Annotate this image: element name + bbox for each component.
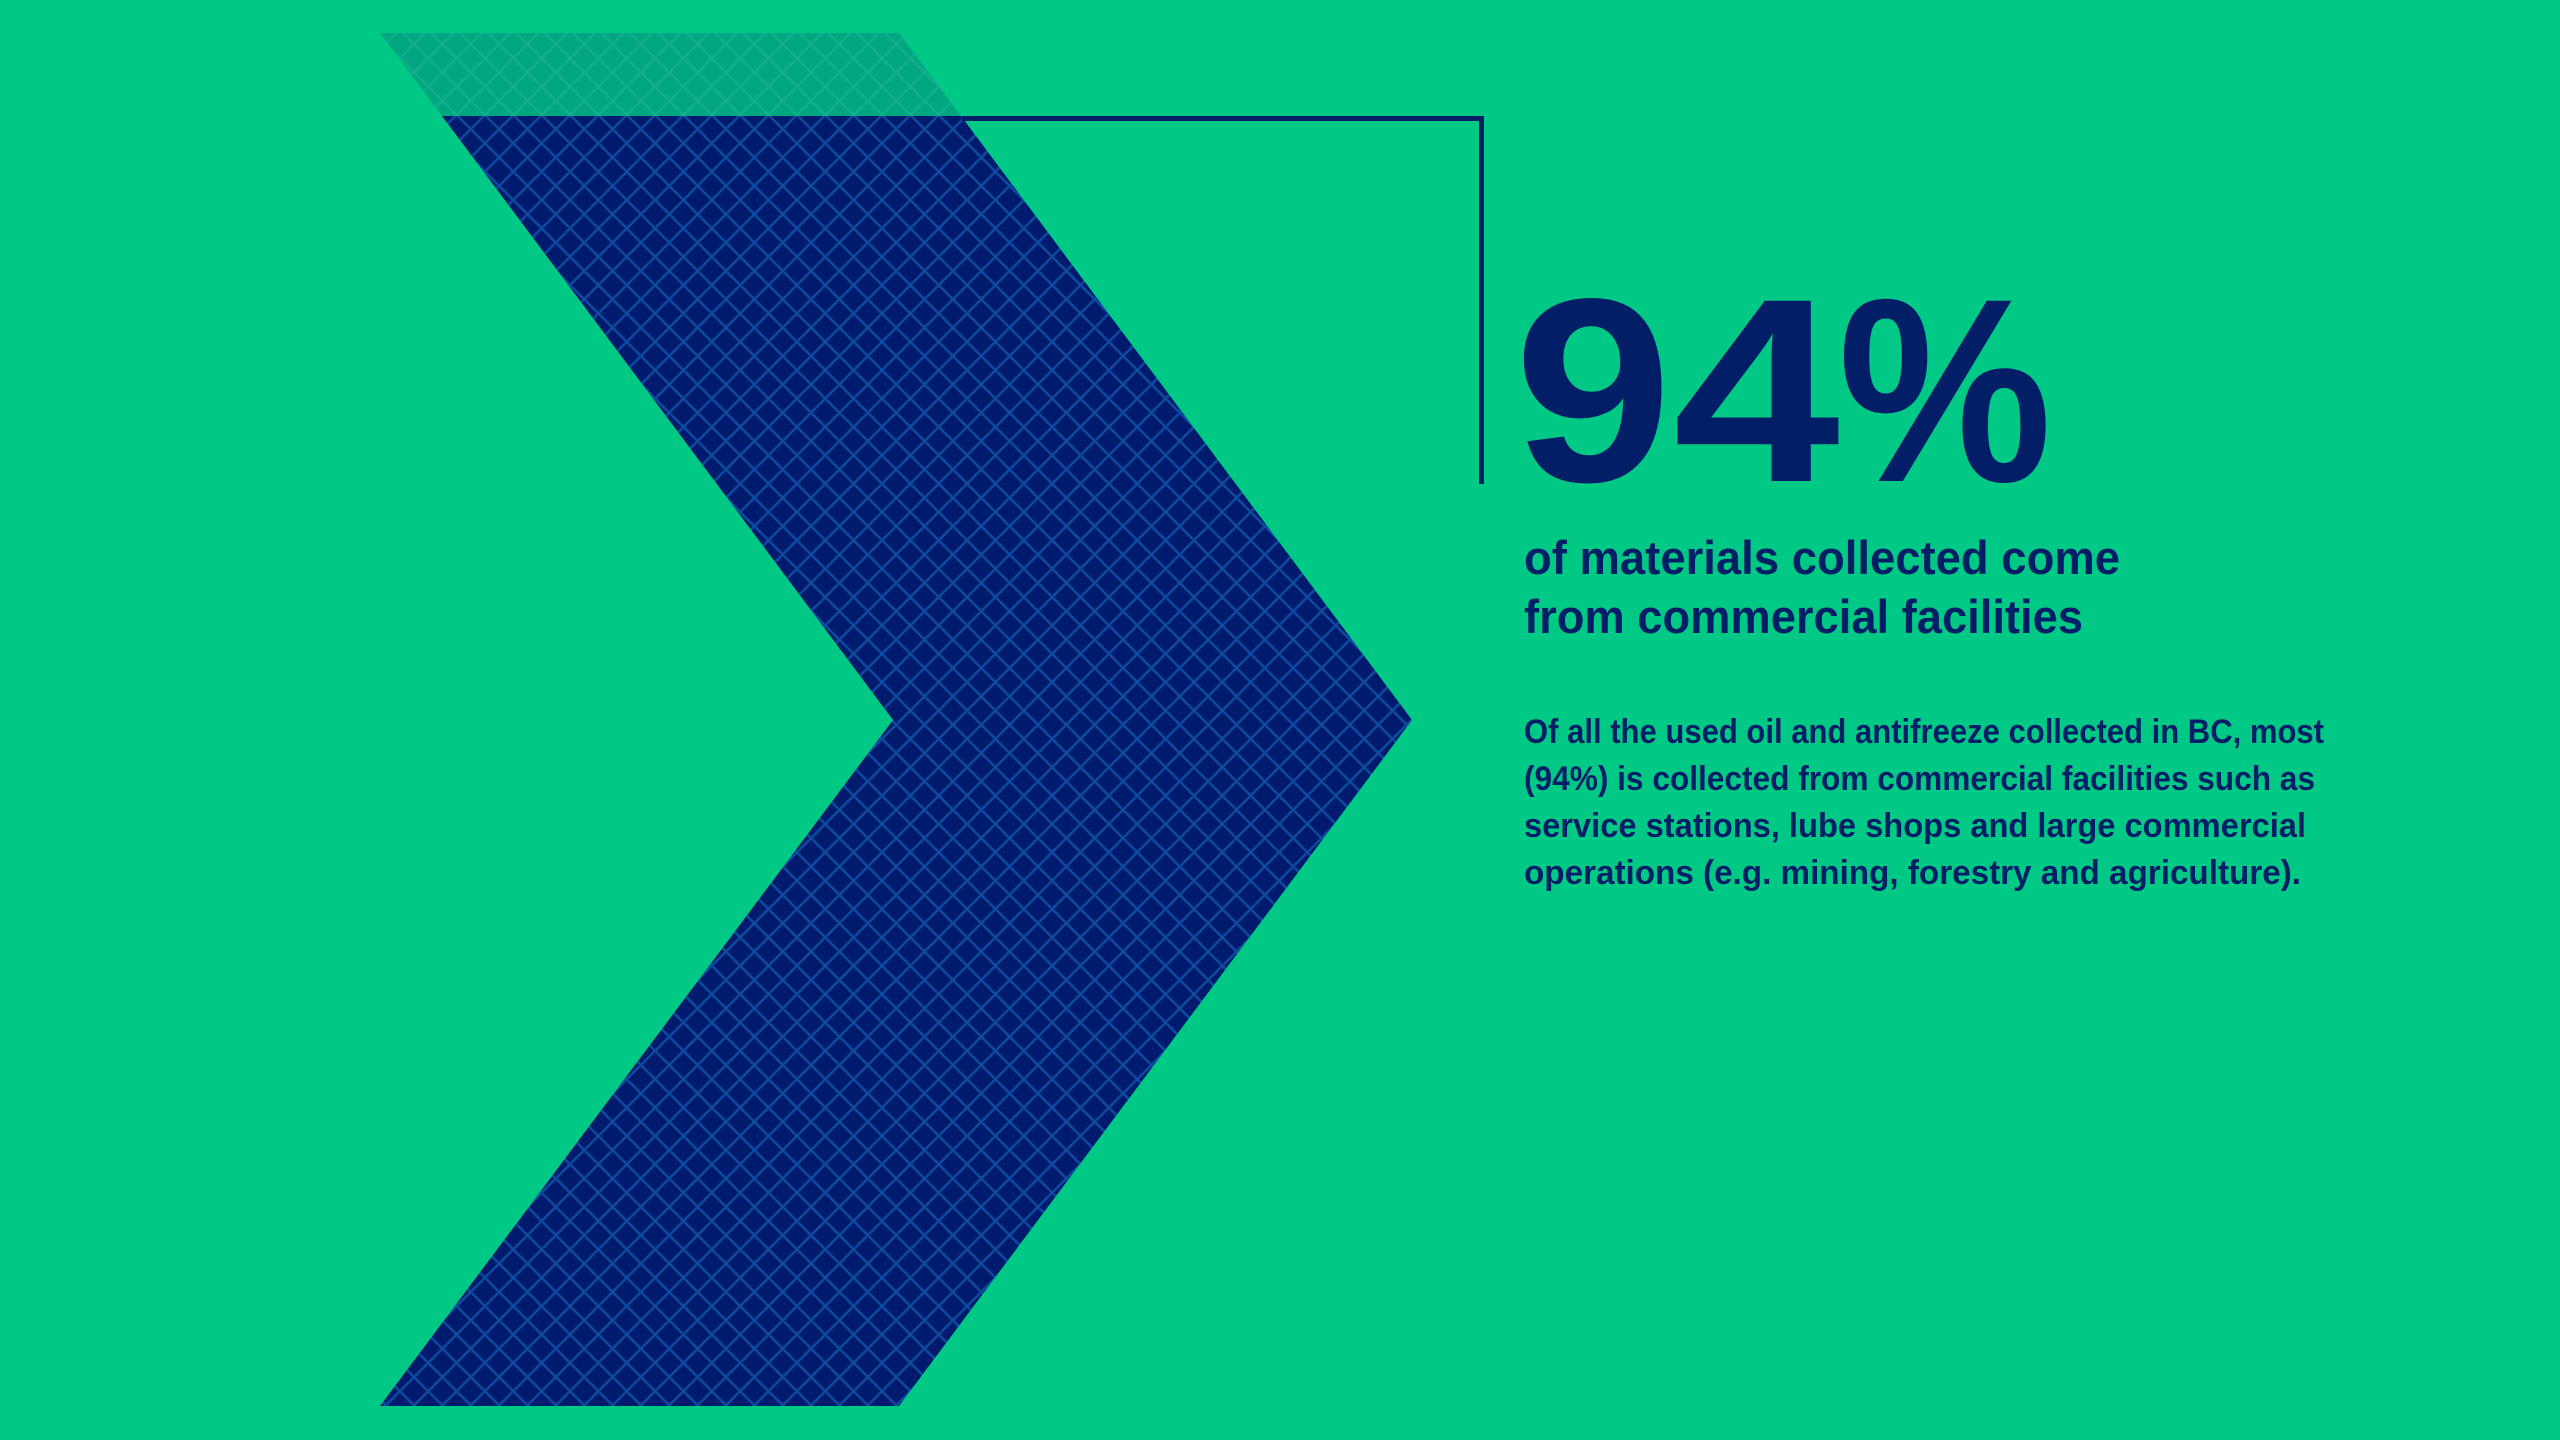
body text [1524,713,2324,892]
big statistic: 94%: % [1838,244,2052,537]
chevron top strip: faded hatch band [380,33,961,116]
body text: (94%) is collected from commercial facilities such as [1524,760,2315,798]
big statistic: 94%: 9 [1514,244,1672,537]
body text: operations (e.g. mining, forestry and agriculture). [1524,854,2301,892]
subheading [1524,531,2120,643]
subheading: of materials collected come [1524,531,2120,584]
big statistic: 94% [1514,244,2052,537]
body text: service stations, lube shops and large commercial [1524,807,2306,845]
big statistic: 94%: 4 [1673,244,1842,537]
body text: Of all the used oil and antifreeze collected in BC, most [1524,713,2324,751]
connector line from chevron to statistic [962,118,1482,484]
chevron: navy hatched arrow [380,116,1412,1406]
subheading: from commercial facilities [1524,590,2083,643]
